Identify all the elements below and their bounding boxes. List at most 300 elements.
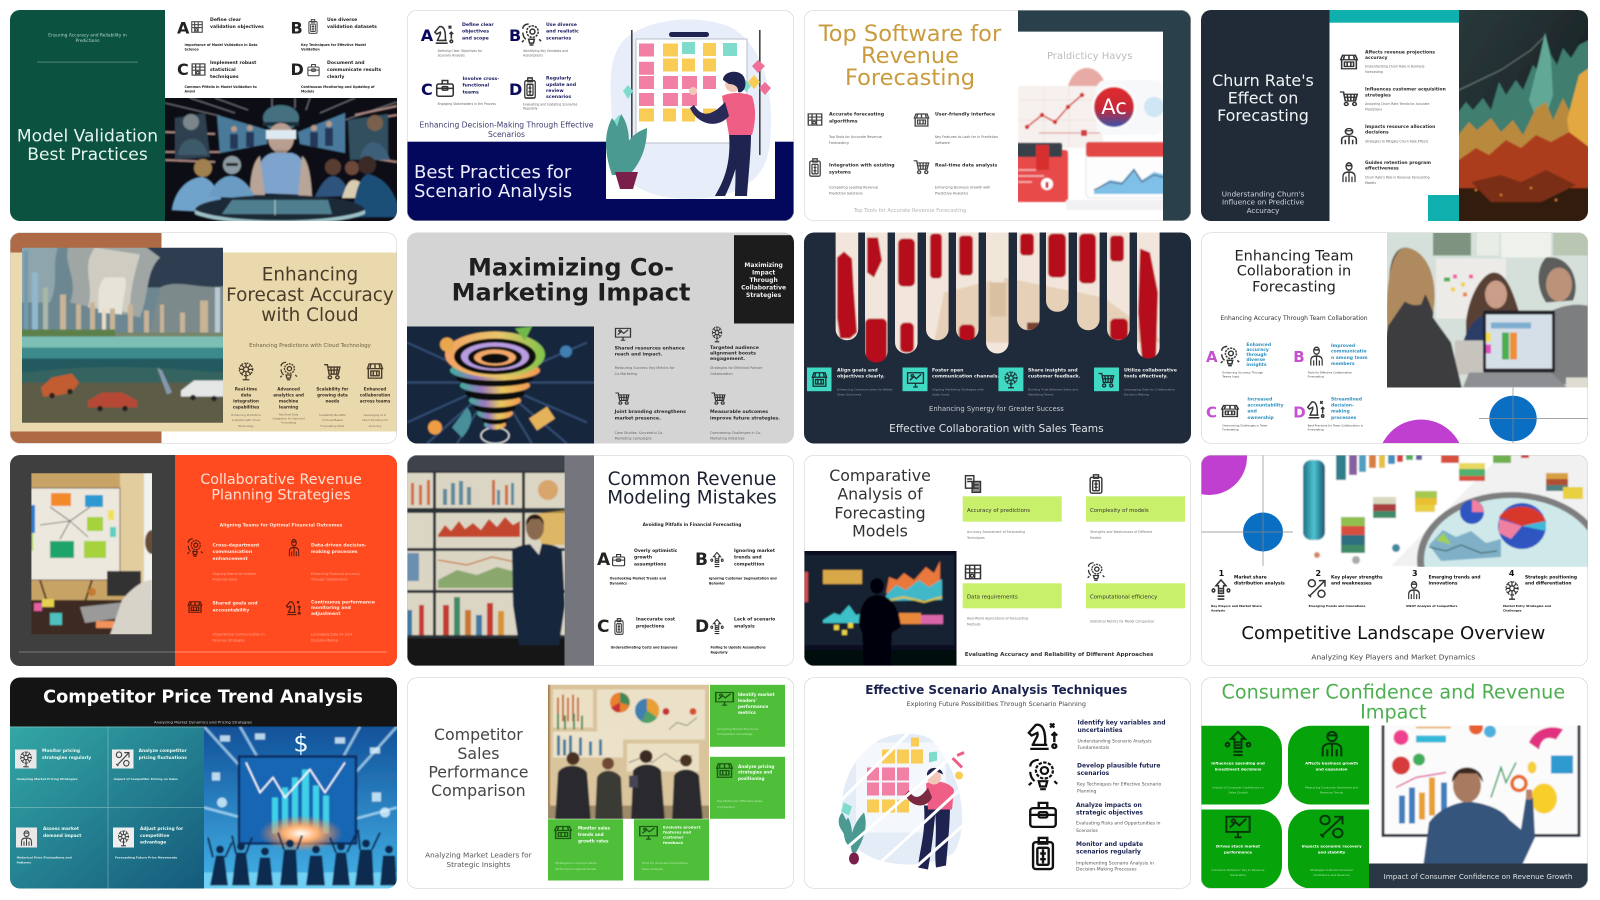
item 3: SWOT Analysis of Competitors — [1406, 604, 1458, 608]
item A: Scenario Analysis — [438, 53, 465, 57]
item A: Define clear — [210, 17, 242, 23]
item: resource allocation — [1342, 124, 1435, 144]
title: Churn Rate's — [1212, 71, 1314, 90]
box: monitor sales trends: Strategies to Improve Sales — [555, 861, 597, 865]
item: retention program — [1343, 160, 1431, 185]
item A: diverse — [1246, 357, 1265, 363]
title: Effective Scenario Analysis Techniques — [865, 683, 1127, 697]
illustration: prediction software dashboard — [1018, 32, 1163, 210]
item 3: innovations — [1428, 580, 1458, 586]
teal grid panel — [10, 726, 204, 888]
item: revenue projections: Forecasting — [1365, 70, 1383, 74]
item 4: 4 — [1509, 569, 1515, 578]
title: Impact — [1360, 700, 1427, 724]
item B: Use diverse — [546, 22, 577, 28]
item C: ownership — [1247, 415, 1275, 421]
item C: C — [597, 617, 609, 637]
feature: integration with existing systems: Comparing Leading Revenue — [829, 186, 878, 190]
item: data-driven: making processes — [311, 549, 358, 555]
title: Collaborative Revenue — [200, 472, 362, 488]
item D: communicate results — [327, 67, 381, 73]
caption band — [1369, 864, 1588, 888]
column: collaboration: collaboration — [360, 392, 390, 398]
item: analyze competitor pricing: pricing fluctuations — [139, 755, 187, 761]
item: customer acquisition: strategies — [1365, 92, 1391, 98]
item B: Use diverse — [327, 17, 357, 23]
item: customer acquisition — [1340, 87, 1446, 112]
item: continuous performance — [286, 600, 375, 642]
item C: and — [1247, 409, 1257, 415]
item: targeted audience: Strategies for Effective Partner — [710, 366, 763, 370]
item B: B — [290, 18, 303, 38]
item A — [1206, 342, 1271, 378]
tile: economic recovery: Strategies to Boost Consumer — [1310, 868, 1354, 872]
item A: Define clear — [462, 22, 494, 28]
box: identify market leaders: Identify market — [738, 692, 775, 697]
column: scalability: Forecasting Tools — [320, 424, 345, 428]
box: analyze pricing strategies — [710, 757, 785, 819]
box: monitor sales trends: Monitor sales — [578, 826, 610, 830]
item: adjust pricing: Forecasting Future Price Movements — [115, 856, 177, 860]
title: Competitive Landscape Overview — [1241, 623, 1545, 644]
panel: Enhancing Forecast Accuracy with Cloud — [10, 232, 397, 444]
item D: update and — [546, 82, 576, 88]
illustration: prediction software dashboard: Praldicticy Havys — [1047, 51, 1132, 62]
column: advanced analytics: Forecasting — [281, 420, 296, 424]
item: cross-departmental: enhancement — [212, 556, 249, 562]
item A: Defining Clear Objectives for — [438, 49, 483, 53]
item: computational efficiency: Statistical Metrics for Model Comparison — [1090, 620, 1154, 624]
item 4: Challenges — [1503, 609, 1522, 613]
box: monitor sales trends: trends and — [578, 832, 604, 837]
item: targeted audience: Collaboration — [710, 372, 733, 376]
feature: align goals — [807, 368, 893, 396]
decoration: purple circle — [1171, 419, 1247, 495]
feature: share insights — [998, 368, 1081, 396]
item: customer acquisition: Influences customer acquisition — [1365, 87, 1446, 93]
feature: real-time data analysis: Enhancing Business Growth with — [935, 186, 990, 190]
box: evaluate product features: feedback — [663, 840, 683, 845]
feature: align goals: Sales Outcomes — [837, 392, 862, 396]
item: identify key variables: Understanding Scenario Analysis — [1078, 738, 1152, 744]
tile: spending and investment: Influences spending and — [1211, 760, 1265, 766]
item B: Improved — [1331, 343, 1355, 349]
item B — [1293, 343, 1368, 378]
item: continuous performance: adjustment — [311, 611, 341, 617]
item: monitor pricing: Monitor pricing — [42, 748, 80, 754]
subtitle: Enhancing Accuracy Through Team Collaboration — [1220, 315, 1368, 322]
image: data monitor and crowd: $ — [293, 730, 309, 758]
item A: Importance of Model Validation in Data — [184, 43, 257, 47]
item: shared resources: Measuring Success: Key Metrics for — [615, 366, 675, 370]
column: real-time data: data — [241, 392, 251, 398]
feature: foster open communication: Sales Goals — [932, 392, 950, 396]
item B: Validation — [301, 48, 320, 52]
item C: Involve cross- — [462, 76, 499, 82]
title: Collaboration in — [1237, 264, 1351, 280]
column: collaboration — [360, 364, 391, 428]
title: Common Revenue — [608, 469, 776, 490]
item: computational efficiency — [1086, 563, 1185, 624]
item: assess market demand: Assess market — [43, 826, 79, 832]
column: advanced analytics: analytics and — [273, 392, 304, 398]
subtitle: Ensuring Accuracy and Reliability in — [48, 32, 127, 38]
feature: integration with existing systems: Integration with existing — [829, 162, 895, 168]
box: analyze pricing strategies: strategies and — [738, 770, 772, 774]
subtitle: Predictions — [75, 38, 100, 44]
image: silhouette viewing data screens — [804, 551, 956, 666]
title: Modeling Mistakes — [607, 487, 777, 508]
item D — [1293, 397, 1364, 432]
item B: competition — [734, 562, 764, 568]
item: shared resources: Shared resources enhance — [615, 346, 685, 352]
item B: Key Techniques for Effective Model — [301, 43, 366, 47]
title: Top Software for — [818, 21, 1002, 47]
column: real-time data: Real-time — [235, 386, 257, 392]
item: shared resources: reach and impact. — [615, 352, 663, 358]
item: cross-departmental: Cross-department — [212, 543, 260, 549]
item D: D — [1293, 404, 1306, 422]
item B: B — [695, 550, 708, 570]
item: assess market demand — [16, 826, 81, 864]
item C: C — [1206, 404, 1217, 422]
item C: Increased — [1247, 397, 1272, 403]
item: measurable outcomes: Marketing Initiatives — [710, 436, 745, 440]
title: Comparative — [829, 466, 931, 485]
feature: user-friendly interface — [914, 112, 998, 145]
footer caption: Top Tools for Accurate Revenue Forecasting — [853, 208, 966, 214]
item: resource allocation: decisions — [1365, 130, 1389, 136]
column: real-time data: Enhancing Predictive — [231, 413, 261, 417]
title: Consumer Confidence and Revenue — [1221, 680, 1565, 704]
item D: D — [509, 80, 522, 99]
subtitle: Enhancing Predictions with Cloud Technology — [249, 343, 372, 349]
item B — [695, 548, 777, 586]
item C — [421, 76, 499, 106]
item A: A — [1206, 348, 1218, 366]
item D: Regularly — [546, 76, 571, 82]
feature: collaborative tools: tools effectively. — [1124, 374, 1168, 380]
item 4: Strategic positioning — [1525, 574, 1577, 580]
image: flooded city — [22, 248, 223, 423]
panel: Effective Scenario Analysis Techniques — [804, 678, 1191, 888]
item: retention program: Guides retention program — [1365, 160, 1431, 166]
item: data-driven: Through Collaboration — [310, 578, 348, 582]
item: shared goals — [188, 601, 265, 642]
tile: business growth: Revenue Trends — [1320, 790, 1344, 794]
tile: business growth — [1288, 726, 1369, 804]
black callout box: Strategies — [746, 292, 782, 299]
item B: Assumptions — [523, 53, 543, 57]
tile: stock market: Generation — [1230, 873, 1246, 877]
tile: spending and investment: Sales Growth — [1228, 790, 1248, 794]
item D: Lack of scenario — [734, 617, 775, 623]
feature: share insights: customer feedback. — [1028, 374, 1081, 380]
item B: Forecasting — [1308, 374, 1324, 378]
item A: A — [597, 550, 611, 570]
item: accuracy of predictions: Accuracy Assessment of Forecasting — [967, 530, 1025, 534]
title: Planning Strategies — [211, 487, 351, 503]
feature: share insights: Marketing Teams — [1028, 392, 1054, 396]
item: measurable outcomes: Measurable outcomes — [710, 409, 768, 415]
item B: B — [509, 26, 521, 45]
item B: Identifying Key Variables and — [523, 49, 568, 53]
item: continuous performance: monitoring and — [311, 605, 351, 611]
tile: spending and investment: Impact of Consumer Confidence on — [1212, 786, 1264, 790]
column: real-time data: integration — [233, 398, 259, 404]
box: evaluate product features — [634, 819, 709, 880]
image: red game pieces in rounded strips — [824, 228, 1174, 378]
subtitle: Enhancing Synergy for Greater Success — [929, 405, 1064, 413]
title: Effective Collaboration with Sales Teams — [889, 423, 1104, 435]
green title panel — [10, 10, 165, 221]
item: accuracy of predictions — [963, 476, 1062, 540]
illustration: prediction software dashboard: Ac — [1101, 95, 1127, 119]
box: identify market leaders — [710, 685, 785, 747]
item: measurable outcomes: Overcoming Challenges in Co- — [710, 431, 762, 435]
panel: Common Revenue Modeling Mistakes — [402, 450, 794, 673]
tile: business growth: Affects business growth — [1305, 760, 1358, 766]
feature: foster open communication: Aligning Marketing Strategies with — [932, 388, 984, 392]
item C: techniques — [210, 74, 239, 80]
item B: Tools for Effective Collaborative — [1307, 370, 1352, 374]
feature: align goals: Enhancing Communication for Better — [837, 388, 893, 392]
item: accuracy of predictions: Accuracy of predictions — [967, 508, 1030, 514]
black callout box — [734, 235, 794, 324]
panel: Competitor Sales Performance Comparison — [407, 678, 794, 888]
item: adjust pricing — [113, 826, 184, 860]
panel: Maximizing Co-Marketing Impact — [402, 232, 794, 448]
item B: scenarios — [546, 35, 571, 41]
caption band: Impact of Consumer Confidence on Revenue Growth — [1384, 872, 1572, 881]
item D: clearly — [327, 74, 344, 80]
feature: user-friendly interface: Key Features to Look for in Prediction — [935, 135, 998, 139]
brown bands — [10, 232, 162, 444]
item C: Implement robust — [210, 60, 257, 66]
tile: stock market: Drives stock market — [1216, 844, 1260, 848]
panel: Collaborative Revenue Planning Strategies — [10, 455, 397, 666]
bottom caption: Evaluating Accuracy and Reliability of Different Approaches — [965, 652, 1154, 658]
item C — [177, 60, 257, 94]
feature: foster open communication: Foster open — [932, 368, 963, 374]
item 2: and weaknesses — [1331, 580, 1372, 586]
item B: Ignoring Customer Segmentation and — [709, 577, 777, 581]
panel: Consumer Confidence and Revenue Impact — [1201, 678, 1596, 888]
subtitle: Avoiding Pitfalls in Financial Forecasting — [643, 522, 741, 528]
box: identify market leaders: performance — [738, 704, 768, 709]
item: develop plausible scenarios: Planning — [1077, 788, 1097, 794]
title: Forecasting — [1217, 106, 1309, 125]
feature: foster open communication — [902, 368, 1000, 396]
column: scalability: needs — [325, 398, 340, 404]
title: Competitor Price Trend Analysis — [43, 688, 363, 708]
item A: Overly optimistic — [634, 548, 678, 554]
box: monitor sales trends — [548, 819, 623, 880]
subtitle: Understanding Churn's — [1222, 190, 1304, 199]
tile: economic recovery: Confidence and Revenue — [1314, 873, 1350, 877]
item: adjust pricing: advantage — [140, 840, 166, 846]
item: cross-departmental: Aligning Teams for Unified — [212, 572, 256, 576]
item 4: and differentiation — [1525, 580, 1572, 586]
box: analyze pricing strategies: Analyze pricing — [738, 764, 774, 769]
item D: Regularly — [710, 650, 729, 654]
item: monitor and update: scenarios regularly — [1076, 848, 1141, 856]
item C: Underestimating Costs and Expenses — [611, 645, 678, 649]
subtitle: Analyzing Market Dynamics and Pricing Strategies — [154, 720, 252, 724]
tile: stock market: Consumer Behavior: Key to Revenue — [1212, 868, 1265, 872]
item 1 — [1211, 569, 1285, 613]
feature: collaborative tools: Decision-Making — [1124, 392, 1149, 396]
box: identify market leaders: Competitive Advantage — [717, 732, 753, 736]
title: Performance — [428, 762, 528, 782]
feature: accurate forecasting algorithms — [808, 112, 884, 145]
title: Model Validation — [17, 126, 158, 146]
item: develop plausible scenarios: Key Techniques for Effective Scenario — [1077, 782, 1162, 788]
feature: accurate forecasting algorithms: Forecasting — [829, 141, 849, 145]
navy band — [407, 142, 794, 221]
item D — [509, 76, 578, 110]
title: Revenue — [861, 43, 959, 69]
item: targeted audience: engagement. — [710, 356, 745, 362]
item: joint branding: Case Studies: Successful Co- — [615, 431, 664, 435]
item: shared goals: Revenue Strategies — [212, 638, 245, 642]
black callout box: Impact — [752, 270, 775, 276]
image: marketing plan whiteboard — [31, 473, 152, 634]
item: customer acquisition: Predictions — [1365, 108, 1382, 112]
subtitle: Strategic Insights — [446, 860, 511, 869]
image: boardroom with holographic screens — [165, 98, 397, 221]
item B: members — [1331, 361, 1355, 367]
item: monitor and update: Decision-Making Processes — [1076, 866, 1137, 872]
item C: functional — [462, 83, 490, 89]
item: targeted audience: alignment boosts — [710, 351, 756, 357]
panel: Effective Collaboration with Sales Teams — [804, 228, 1191, 444]
decoration: blue circle with crosshair — [1201, 455, 1293, 566]
box: identify market leaders: metrics — [738, 710, 756, 715]
item A: Enhanced — [1246, 342, 1271, 348]
box: monitor sales trends: Performance Against Rivals — [555, 867, 597, 871]
image: mountain chart — [1459, 10, 1588, 221]
item C: statistical — [210, 67, 236, 73]
item A — [597, 548, 678, 586]
item C: Overcoming Challenges in Team — [1222, 424, 1268, 428]
item: cross-departmental — [188, 539, 260, 582]
item: assess market demand: Historical Price Fluctuations and — [17, 856, 72, 860]
subtitle: Aligning Teams for Optimal Financial Outcomes — [220, 523, 343, 529]
title: Best Practices — [27, 145, 148, 165]
feature: collaborative tools: Leveraging Data for Collaborative — [1124, 388, 1175, 392]
decoration: purple circle — [1378, 420, 1464, 506]
item: data-driven: Enhancing Financial Accuracy — [311, 572, 360, 576]
column: advanced analytics — [273, 362, 305, 424]
item D: Forecasting — [1308, 428, 1324, 432]
title: Scenario Analysis — [414, 181, 572, 202]
column: real-time data — [231, 363, 261, 428]
item: revenue projections: accuracy — [1365, 55, 1387, 61]
item: measurable outcomes — [710, 393, 780, 440]
item: monitor and update: Implementing Scenario Analysis in — [1076, 860, 1154, 866]
item: analyze impacts: strategic objectives — [1076, 810, 1143, 816]
item C: teams — [462, 89, 479, 95]
column: collaboration: Accuracy — [369, 424, 382, 428]
item C: projections — [636, 623, 665, 629]
item A: Dynamics — [610, 582, 627, 586]
column: real-time data: capabilities — [233, 404, 260, 410]
feature: integration with existing systems — [810, 159, 895, 196]
feature: align goals: objectives clearly. — [837, 374, 885, 380]
column: real-time data: Analytics with Cloud — [232, 418, 260, 422]
tile: business growth: Measuring Consumer Sentiment and — [1305, 786, 1358, 790]
column: collaboration: across teams — [360, 398, 391, 404]
image: team meeting at laptop — [1387, 232, 1588, 388]
decoration: blue circle with crosshair — [1479, 388, 1588, 444]
item 1: Market share — [1234, 574, 1267, 580]
item: measurable outcomes: improve future strategies. — [710, 416, 780, 422]
item: analyze competitor pricing: Impact of Competitor Pricing on Sales — [114, 777, 178, 781]
column: scalability: growing data — [317, 392, 348, 398]
item: analyze impacts: Analyze impacts on — [1076, 802, 1142, 809]
box: identify market leaders: leaders' — [738, 698, 757, 703]
item C: C — [421, 80, 433, 99]
item: monitor pricing — [15, 748, 91, 781]
item A: A — [177, 18, 190, 38]
item: adjust pricing: Adjust pricing for — [140, 826, 184, 832]
title: Enhancing — [262, 264, 358, 286]
feature: accurate forecasting algorithms: Accurate forecasting — [829, 112, 884, 118]
tile: spending and investment — [1201, 726, 1282, 804]
item 3: 3 — [1412, 569, 1418, 578]
item D: scenarios — [546, 94, 571, 100]
item B: validation datasets — [327, 24, 377, 30]
illustration: faded person at sticky note board — [804, 728, 989, 878]
item: adjust pricing: competitive — [140, 833, 169, 839]
item 1: distribution analysis — [1234, 580, 1285, 586]
item B: Ignoring market — [734, 548, 776, 554]
item D: Models — [301, 90, 314, 94]
feature: real-time data analysis — [914, 161, 997, 196]
subtitle: Analyzing Market Leaders for — [425, 850, 532, 860]
feature: accurate forecasting algorithms: algorithms — [829, 118, 858, 124]
feature: real-time data analysis: Real-time data analysis — [935, 162, 997, 168]
item: data requirements: Methods — [967, 623, 981, 627]
panel: Enhancing Team Collaboration in Forecasting — [1201, 228, 1596, 506]
item A: and scope — [462, 35, 489, 41]
item D: Failing to Update Assumptions — [710, 645, 766, 649]
item: joint branding: Joint branding strengthens — [614, 409, 686, 415]
item: targeted audience — [710, 327, 763, 376]
title: Maximizing Co- — [468, 254, 674, 282]
item: complexity of models — [1086, 475, 1185, 540]
feature: user-friendly interface: User-friendly interface — [935, 112, 995, 118]
item: resource allocation: Impacts resource allocation — [1365, 124, 1435, 130]
tile: spending and investment: investment decisions — [1215, 766, 1262, 772]
item: develop plausible scenarios: scenarios — [1077, 770, 1110, 777]
black header — [10, 678, 397, 726]
item D: decision- — [1331, 402, 1354, 408]
item 1: Analysis — [1211, 609, 1225, 613]
black callout box: Maximizing — [744, 262, 783, 269]
feature: share insights: Share insights and — [1028, 368, 1078, 374]
feature: foster open communication: communication channels. — [932, 374, 1000, 380]
item D: D — [290, 60, 304, 79]
subtitle: Scenarios — [488, 130, 525, 139]
item: retention program: effectiveness — [1365, 166, 1399, 172]
item: monitor pricing: Analyzing Market Pricing Strategies — [17, 777, 78, 781]
item A: growth — [634, 555, 652, 561]
item: identify key variables: Fundamentals — [1078, 745, 1110, 751]
box: analyze pricing strategies: Key Metrics for Effective Sales — [717, 799, 763, 803]
feature: integration with existing systems: Prediction Solutions — [829, 192, 863, 196]
